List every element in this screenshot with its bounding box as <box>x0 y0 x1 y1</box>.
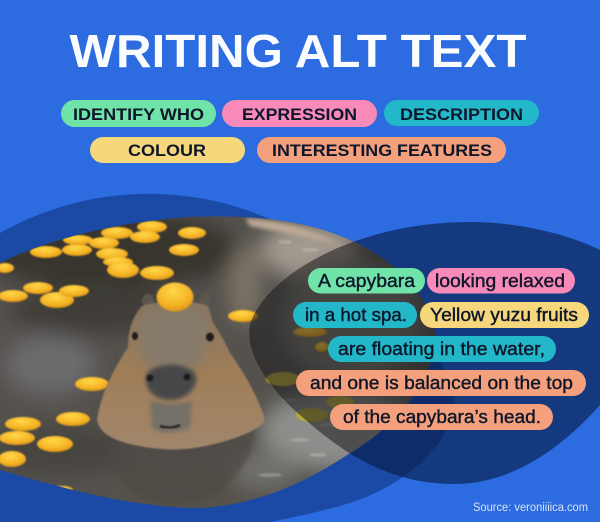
sentence tags <box>293 268 589 430</box>
category tags <box>61 100 539 163</box>
tag: expression <box>222 100 377 127</box>
yuzu fruits <box>0 221 354 494</box>
tag: expression: EXPRESSION <box>242 105 357 124</box>
source credit: Source: veroniiiica.com <box>473 502 588 514</box>
yuzu on head <box>156 282 194 312</box>
title: WRITING ALT TEXT <box>70 25 526 77</box>
sentence: description: in a hot spa. <box>305 305 407 325</box>
sentence: floating <box>328 336 556 362</box>
dark blue right blob <box>249 222 600 484</box>
tag: interesting features: INTERESTING FEATURES <box>272 141 492 160</box>
sentence: colour <box>420 302 589 328</box>
water sparkles <box>258 240 340 477</box>
sentence: balanced <box>296 370 586 396</box>
sentence: head: of the capybara’s head. <box>343 407 541 427</box>
sentence: who: A capybara <box>318 271 416 291</box>
tag: identify who <box>61 100 216 127</box>
sentence: description <box>293 302 417 328</box>
tag: identify who: IDENTIFY WHO <box>73 105 204 124</box>
dark blue left blob <box>0 194 455 522</box>
sentence: head <box>330 404 553 430</box>
sentence: who <box>308 268 425 294</box>
shadow of right blob over photo <box>249 242 435 454</box>
capybara reflection <box>216 432 254 484</box>
photo: capybara in hot spa with yuzu fruits <box>0 216 435 508</box>
tag: interesting features <box>257 137 506 163</box>
tag: description: DESCRIPTION <box>400 105 523 124</box>
sentence: expression <box>427 268 575 294</box>
sentence: colour: Yellow yuzu fruits <box>430 305 578 325</box>
capybara <box>97 292 265 449</box>
sentence: expression: looking relaxed <box>435 271 565 291</box>
tag: colour <box>90 137 245 163</box>
sentence: floating: are floating in the water, <box>338 339 545 359</box>
tag: colour: COLOUR <box>128 141 206 160</box>
rock edge top right <box>245 218 340 245</box>
tag: description <box>384 100 539 126</box>
blob overlap <box>350 362 456 477</box>
sentence: balanced: and one is balanced on the top <box>310 373 573 393</box>
